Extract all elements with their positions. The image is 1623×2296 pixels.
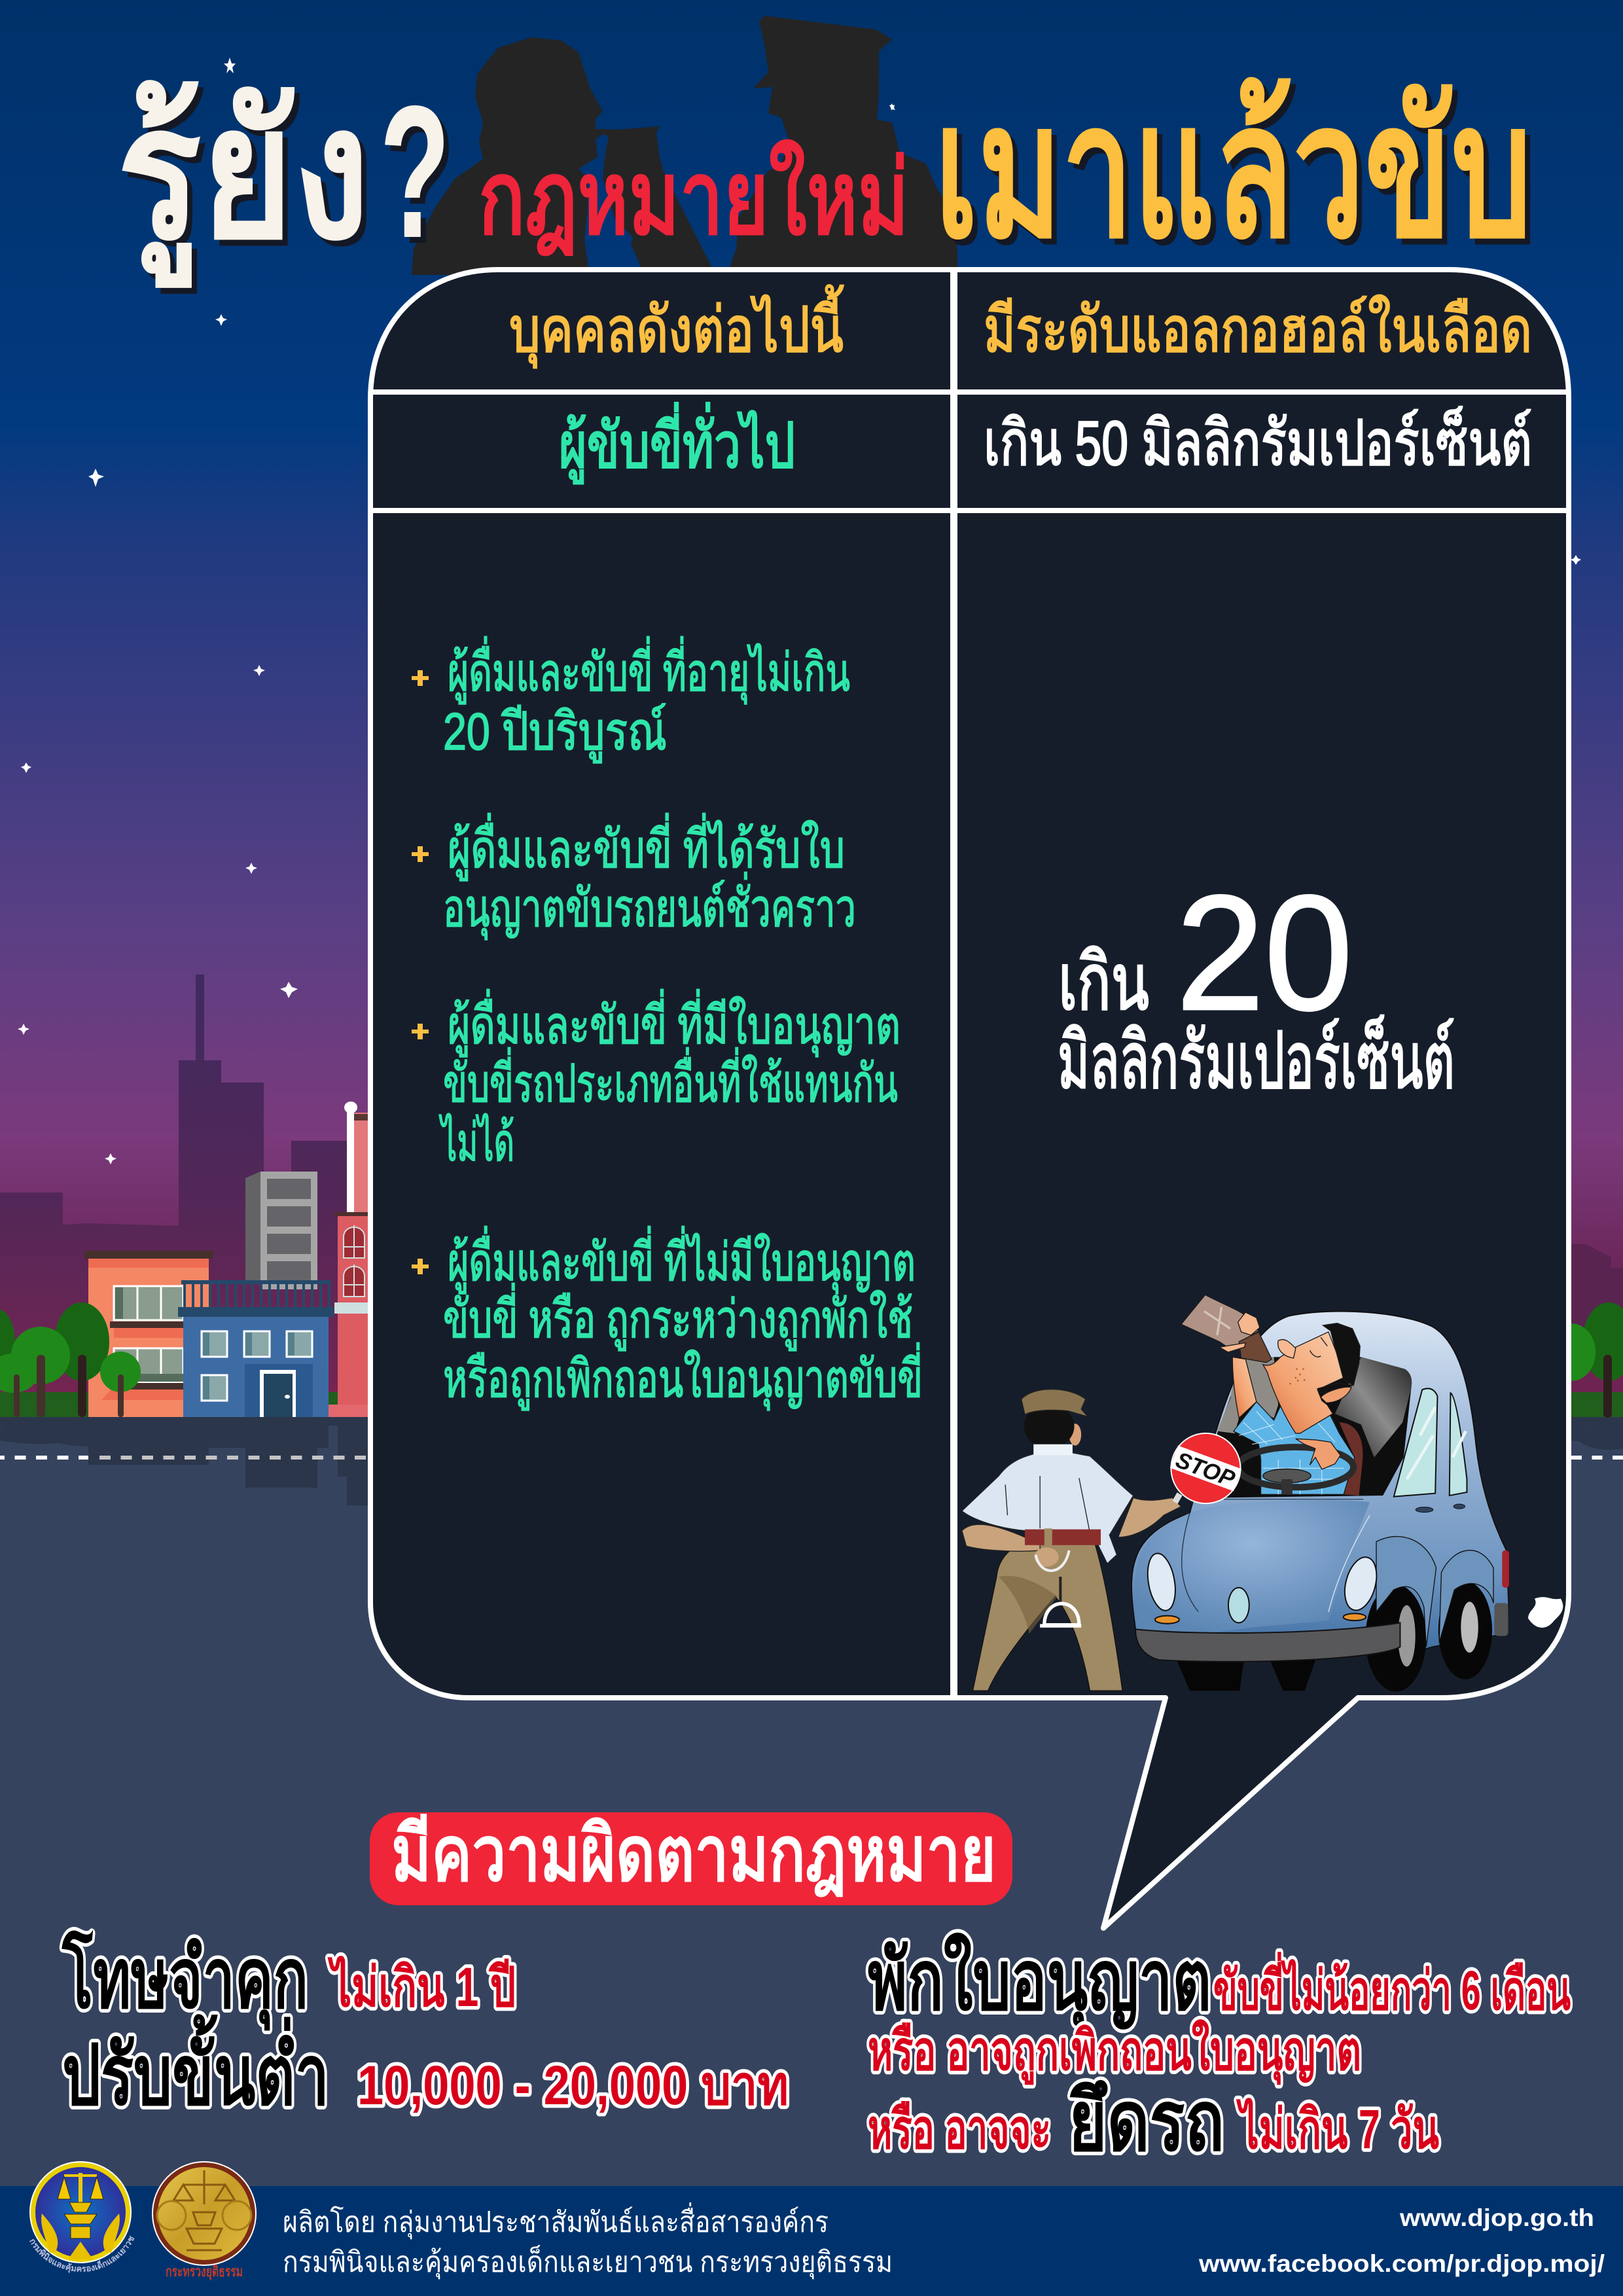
licence suspension: พักใบอนุญาต [868, 1933, 1211, 2033]
stop sign: STOP [1173, 1448, 1239, 1492]
footer producer text: กรมพินิจและคุ้มครองเด็กและเยาวชน กระทรวงยุติธรรม [283, 2245, 893, 2280]
imprisonment: โทษจำคุก [62, 1929, 308, 2031]
logo: ministry of justice [152, 2162, 256, 2281]
trees left [0, 1302, 141, 1417]
row: general drivers: ผู้ขับขี่ทั่วไป [559, 403, 795, 484]
logo: department of juvenile observation [29, 2161, 135, 2273]
speech bubble table [370, 270, 1569, 1928]
item: other vehicle licence: ผู้ดื่มและขับขี่ ที่มีใบอนุญาต [448, 990, 901, 1057]
driver [1232, 1323, 1360, 1494]
steering wheel [1238, 1439, 1353, 1494]
city buildings left [0, 975, 368, 1417]
footer band [0, 2186, 1623, 2296]
wheels underside [1177, 1660, 1315, 1691]
penalties right [868, 1933, 1571, 2168]
item: temporary licence [412, 814, 856, 940]
car body [1132, 1312, 1508, 1656]
vehicle seizure: ยึดรถ [1069, 2075, 1224, 2168]
vehicle seizure: ไม่เกิน 7 วัน [1236, 2098, 1439, 2160]
title: รู้ยัง?: รู้ยัง [117, 70, 370, 289]
minimum fine: 10,000 - 20,000 บาท [357, 2054, 789, 2116]
illustration: police stopping drunk driver [962, 1295, 1563, 1692]
city and trees right [1547, 1244, 1623, 1418]
vehicle seizure [868, 2075, 1439, 2168]
logo: department of juvenile observation: กรมพินิจและคุ้มครองเด็กและเยาวชน [29, 2236, 135, 2273]
title: รู้ยัง?: ? [385, 73, 455, 283]
list of special drivers [412, 637, 923, 1410]
exhaust puff [1528, 1597, 1563, 1628]
badge: legal offence: มีความผิดตามกฎหมาย [391, 1811, 996, 1898]
minimum fine: ปรับขั้นต่ำ [62, 2014, 329, 2123]
footer producer text: ผลิตโดย กลุ่มงานประชาสัมพันธ์และสื่อสารองค์กร [283, 2202, 829, 2240]
penalties left [62, 1929, 789, 2123]
road reflections [0, 1423, 1623, 1505]
title: รู้ยัง?: รู้ยัง [122, 76, 375, 295]
item: other vehicle licence: ไม่ได้ [438, 1113, 514, 1172]
footer producer text [283, 2202, 893, 2280]
item: no licence or suspended: ขับขี่ หรือ ถูกระหว่างถูกพักใช้ [443, 1283, 913, 1351]
item: no licence or suspended: หรือถูกเพิกถอนใบอนุญาตขับขี่ [443, 1343, 923, 1410]
vehicle seizure: หรือ อาจจะ [868, 2098, 1051, 2160]
imprisonment: ไม่เกิน 1 ปี [327, 1956, 516, 2018]
silhouette: man drinking and police officer [412, 16, 958, 275]
road centre dashes [0, 1456, 1623, 1460]
rear wheels and fenders [1365, 1537, 1493, 1692]
footer websites: www.djop.go.th [1399, 2204, 1594, 2231]
door handles [1416, 1504, 1465, 1513]
headlights and emblem [1144, 1551, 1382, 1624]
item: no licence or suspended [412, 1227, 923, 1410]
night sky background [0, 0, 1623, 1420]
rear tail light [1502, 1551, 1509, 1588]
title: รู้ยัง?: ? [380, 67, 450, 278]
item: temporary licence: ผู้ดื่มและขับขี่ ที่ได้รับใบ [448, 814, 845, 881]
hood [1134, 1500, 1370, 1643]
stop sign [1169, 1433, 1241, 1504]
stars [18, 58, 1581, 1164]
item: no licence or suspended: ผู้ดื่มและขับขี่ ที่ไม่มีใบอนุญาต [448, 1227, 916, 1294]
limit: over 20 mg percent [1058, 861, 1455, 1105]
front bumper [1135, 1623, 1400, 1662]
item: under 20 years: ผู้ดื่มและขับขี่ ที่อายุไม่เกิน [448, 637, 850, 704]
table grid lines [370, 270, 1569, 1700]
footer websites: www.facebook.com/pr.djop.moj/ [1198, 2250, 1605, 2277]
seat [1335, 1357, 1412, 1458]
driver and cabin, drawn at 3x crop scale [1181, 1295, 1467, 1513]
item: under 20 years [412, 637, 850, 763]
windscreen interior [1217, 1357, 1412, 1498]
footer websites [1198, 2204, 1605, 2277]
bottle and hands [1181, 1295, 1272, 1363]
police officer [962, 1390, 1181, 1691]
seat belt [1340, 1422, 1363, 1496]
minimum fine [62, 2014, 789, 2123]
logo: ministry of justice: กระทรวงยุติธรรม [166, 2263, 243, 2281]
item: other vehicle licence: ขับขี่รถประเภทอื่นที่ใช้แทนกัน [443, 1048, 898, 1113]
licence suspension [868, 1933, 1571, 2033]
title: กฎหมายใหม่: กฎหมายใหม่ [478, 139, 909, 257]
limit: over 20 mg percent: เกิน [1058, 939, 1149, 1026]
side windows [1394, 1388, 1467, 1497]
limit: over 20 mg percent: 20 [1176, 861, 1353, 1044]
item: under 20 years: 20 ปีบริบูรณ์ [443, 702, 667, 763]
item: temporary licence: อนุญาตขับรถยนต์ชั่วคราว [443, 872, 856, 940]
item: other vehicle licence [412, 990, 901, 1172]
road [0, 1417, 1623, 2189]
licence revocation: หรือ อาจถูกเพิกถอนใบอนุญาต [868, 2019, 1361, 2085]
header: persons: บุคคลดังต่อไปนี้ [509, 285, 844, 368]
